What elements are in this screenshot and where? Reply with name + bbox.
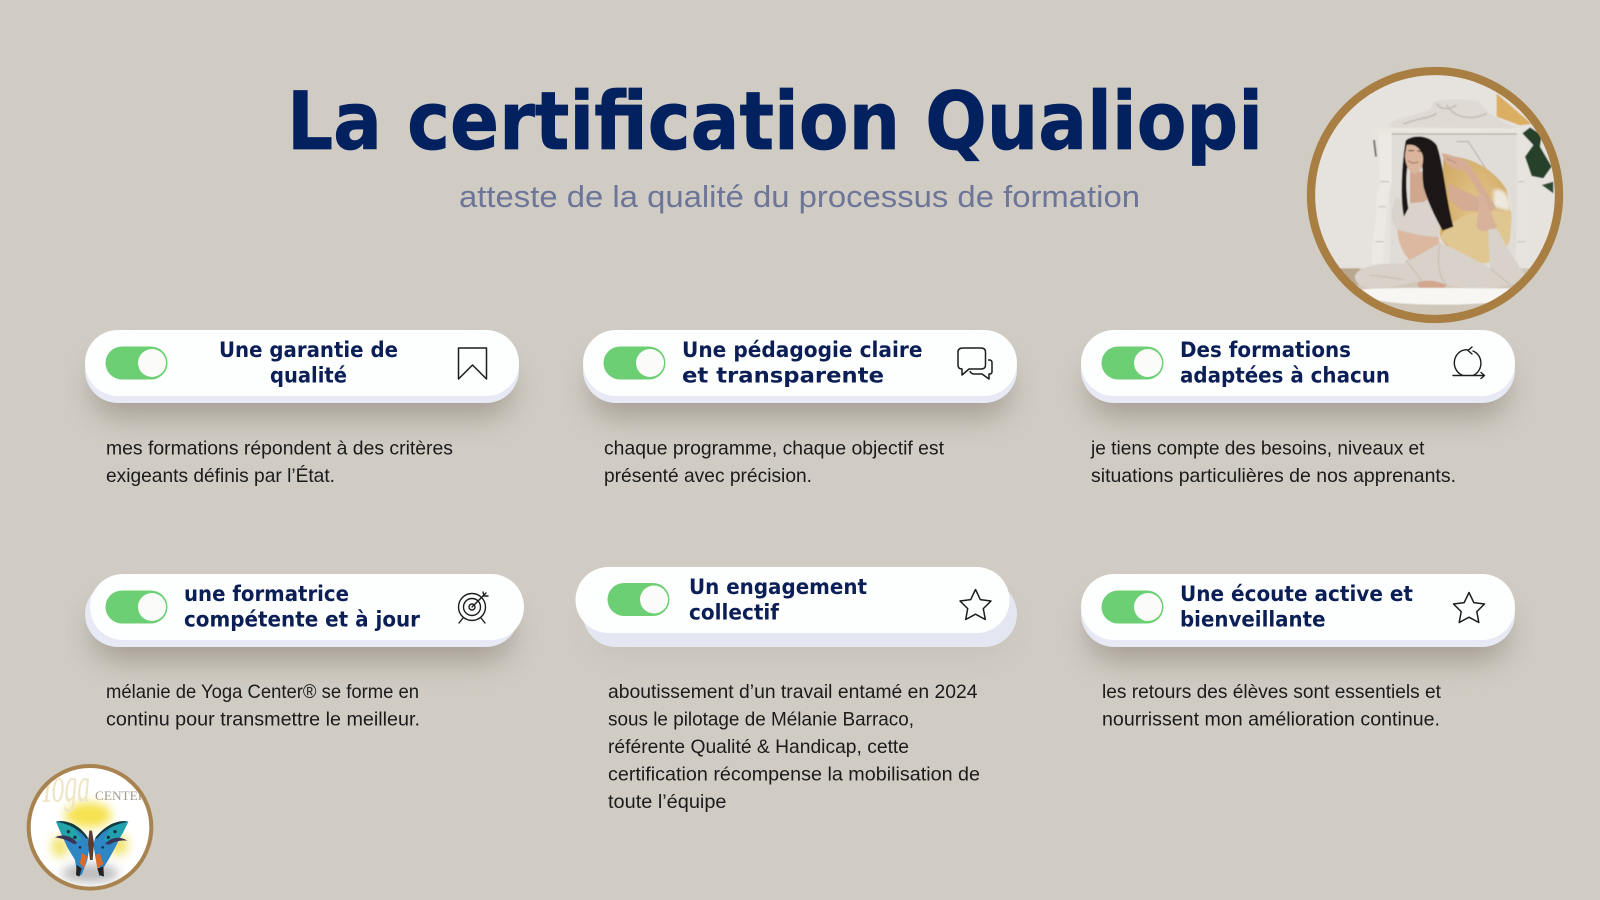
foot [1477, 194, 1497, 231]
card 3: des formations adaptées [1081, 330, 1515, 416]
description 1 [106, 438, 453, 487]
icon: star [1454, 592, 1484, 622]
icon: bookmark [458, 348, 486, 379]
heading: et transparente [682, 364, 884, 388]
mirror [1390, 135, 1518, 267]
toggle [1102, 590, 1164, 624]
title: La certification Qualiopi [287, 75, 1263, 168]
card 1: une garantie de qualité [85, 330, 519, 416]
toggle [608, 583, 670, 616]
description 5: aboutissement d’un travail entamé en 2024 [608, 681, 978, 703]
heading: bienveillante [1180, 608, 1326, 632]
top [1392, 197, 1441, 237]
heading: Un engagement [689, 575, 867, 600]
description 2 [604, 438, 945, 487]
heading [689, 575, 867, 626]
icon: chat bubbles [958, 348, 992, 379]
face [1405, 145, 1423, 174]
description 6 [1102, 681, 1442, 730]
description 5: toute l’équipe [608, 791, 726, 813]
heading: compétente et à jour [184, 608, 420, 632]
heading: Une pédagogie claire [682, 338, 922, 363]
rear arm [1448, 183, 1480, 212]
rug [1362, 288, 1510, 305]
logo: Yoga Center butterfly: CENTER [95, 789, 147, 803]
description 6: les retours des élèves sont essentiels et [1102, 681, 1442, 703]
heading [219, 338, 398, 388]
posts [1386, 132, 1392, 186]
toggle [106, 590, 168, 624]
wings [56, 821, 90, 876]
hair [1402, 137, 1453, 231]
description 4: continu pour transmettre le meilleur. [106, 708, 420, 730]
card 2: une pédagogie claire [583, 330, 1017, 416]
heading: une formatrice [184, 582, 349, 607]
card 6: une écoute active [1081, 574, 1515, 660]
photo: yoga teacher in round frame [1307, 67, 1573, 335]
heading: collectif [689, 600, 780, 626]
heading [682, 338, 922, 388]
description 3 [1090, 438, 1456, 487]
description 5: certification récompense la mobilisation de [608, 764, 980, 786]
heading: Une garantie de [219, 338, 398, 363]
icon: target [458, 592, 488, 623]
description 2: présenté avec précision. [604, 465, 812, 487]
heading: Une écoute active et [1180, 582, 1413, 607]
heading: qualité [270, 364, 347, 388]
plant [1522, 127, 1552, 178]
icon: star [960, 590, 991, 620]
card 4: une formatrice [85, 574, 524, 660]
raised arm [1442, 153, 1496, 213]
heading: adaptées à chacun [1180, 364, 1390, 388]
description 1: exigeants définis par l’État. [106, 464, 335, 487]
description 4: mélanie de Yoga Center® se forme en [106, 681, 419, 703]
description 1: mes formations répondent à des critères [106, 438, 453, 460]
ring [1311, 71, 1559, 319]
heading [1180, 582, 1413, 632]
icon: cycle arrow [1453, 347, 1484, 378]
heading [184, 582, 420, 632]
leggings [1355, 228, 1524, 288]
heading: Des formations [1180, 338, 1351, 363]
toggle [106, 346, 168, 380]
belly [1397, 229, 1439, 260]
description 3: je tiens compte des besoins, niveaux et [1090, 438, 1425, 460]
card 5: un engagement collectif [576, 567, 1017, 652]
person, drawn in detail coordinates [1355, 137, 1524, 305]
description 2: chaque programme, chaque objectif est [604, 438, 945, 460]
description 5 [608, 681, 980, 813]
description 5: référente Qualité & Handicap, cette [608, 736, 909, 758]
toggle [1102, 346, 1164, 380]
subtitle: atteste de la qualité du processus de formation [459, 179, 1140, 214]
description 5: sous le pilotage de Mélanie Barraco, [608, 708, 914, 730]
toggle [604, 346, 666, 380]
logo: Yoga Center butterfly [28, 757, 152, 889]
gong [1440, 156, 1512, 247]
description 3: situations particulières de nos apprenants. [1091, 465, 1456, 487]
neck and chest [1410, 172, 1427, 203]
feet under [1417, 280, 1446, 288]
description 4 [106, 681, 420, 730]
logo: Yoga Center butterfly: Yoga [40, 757, 90, 813]
description 6: nourrissent mon amélioration continue. [1102, 708, 1440, 730]
heading [1180, 338, 1390, 388]
